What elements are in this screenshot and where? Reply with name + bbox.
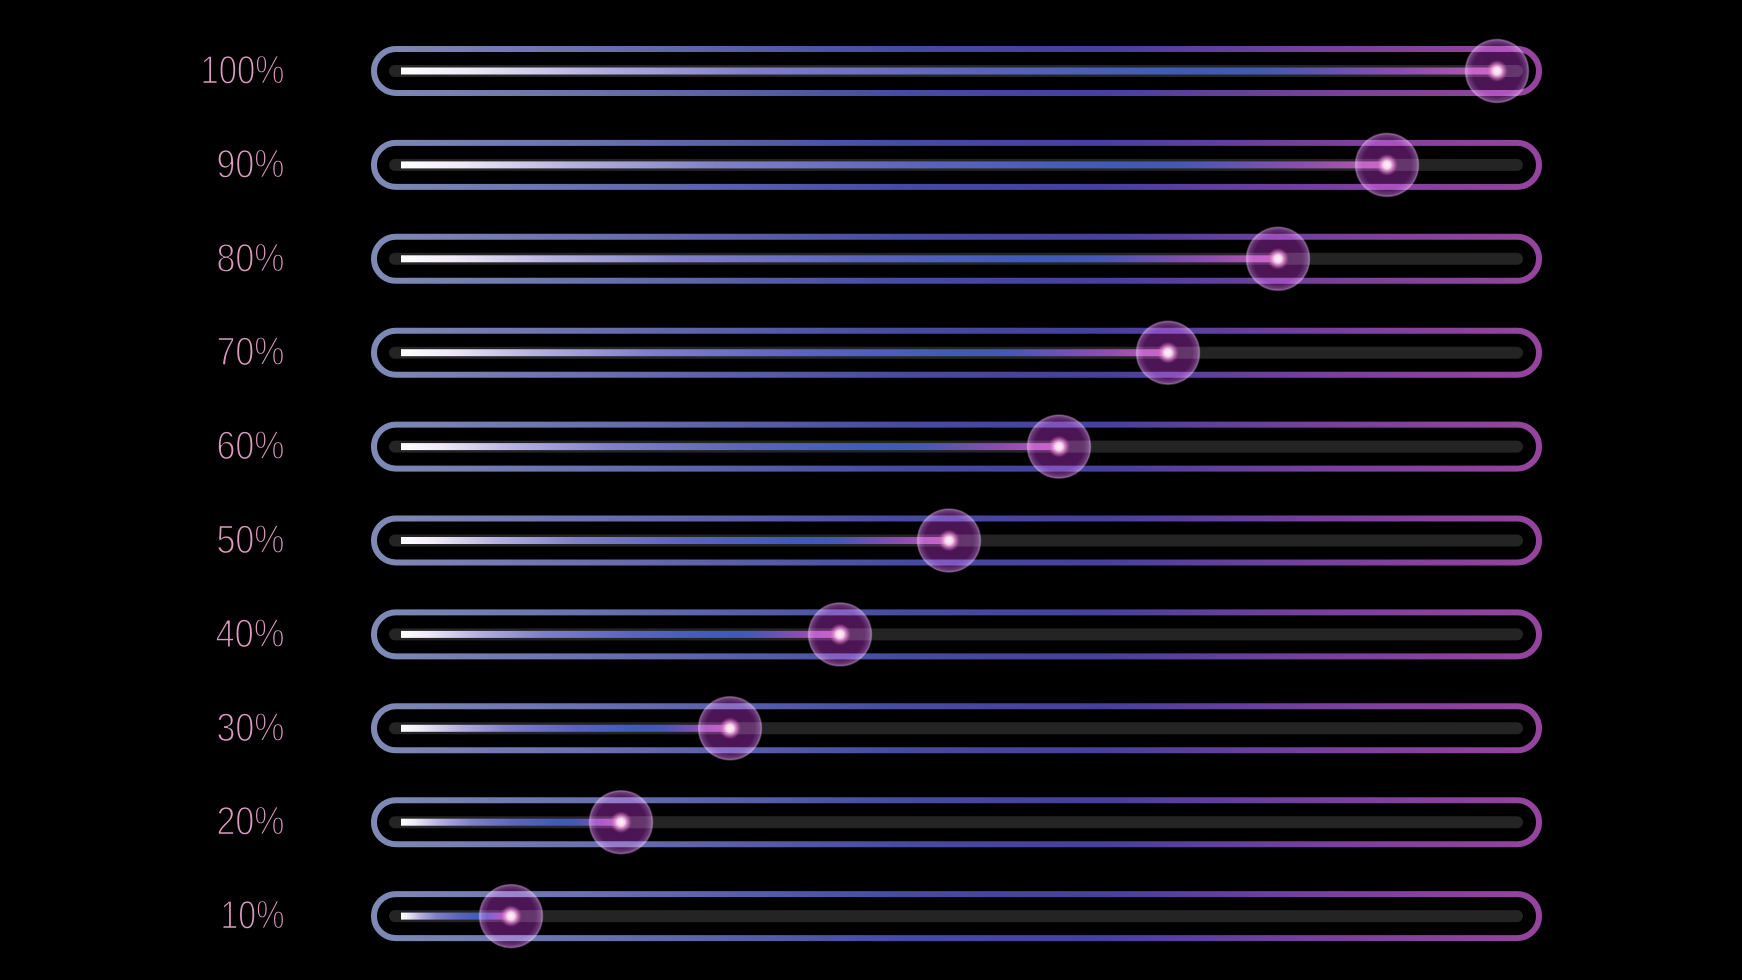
fill bar (401, 819, 621, 826)
capsule outline (374, 143, 1539, 187)
knob (918, 509, 980, 572)
capsule outline (374, 706, 1539, 750)
row: 50% (216, 509, 1539, 572)
fill bar (401, 255, 1278, 262)
label: 20%: 20% (216, 800, 284, 844)
track (389, 441, 1523, 453)
fill bar (401, 68, 1497, 74)
fill bar (401, 537, 949, 544)
track (389, 347, 1523, 359)
row: 80% (216, 227, 1539, 290)
row: 40% (216, 603, 1539, 666)
capsule outline (374, 518, 1539, 562)
label: 50%: 50% (216, 518, 284, 562)
row: 30% (216, 697, 1539, 760)
label: 40%: 40% (216, 612, 284, 656)
fill bar (401, 631, 840, 638)
fill bar (401, 913, 511, 920)
track (389, 816, 1523, 828)
fill bar (401, 443, 1059, 450)
knob (1028, 415, 1090, 478)
capsule outline (374, 425, 1539, 469)
track (389, 253, 1523, 265)
fill bar (401, 349, 1168, 356)
label: 70%: 70% (216, 330, 284, 374)
knob (698, 697, 762, 760)
label: 60%: 60% (216, 424, 284, 468)
capsule outline (374, 612, 1539, 656)
knob (1466, 40, 1528, 102)
capsule outline (374, 800, 1539, 844)
knob (480, 885, 542, 948)
capsule outline (374, 894, 1539, 938)
fill bar (401, 161, 1387, 168)
row: 90% (216, 133, 1539, 196)
knob (1136, 321, 1200, 384)
track (389, 722, 1523, 734)
track (389, 628, 1523, 640)
row: 70% (216, 321, 1539, 384)
label: 10%: 10% (220, 894, 284, 938)
label: 80%: 80% (216, 236, 284, 280)
track (389, 65, 1523, 77)
knob (590, 791, 652, 854)
capsule outline (374, 331, 1539, 375)
knob (1356, 133, 1418, 196)
label: 100%: 100% (200, 48, 284, 92)
track (389, 159, 1523, 171)
capsule outline (374, 237, 1539, 281)
label: 30%: 30% (216, 706, 284, 750)
track (389, 534, 1523, 546)
knob (808, 603, 872, 666)
fill bar (401, 725, 730, 732)
row: 10% (220, 885, 1539, 948)
knob (1246, 227, 1310, 290)
row: 100% (200, 40, 1539, 102)
track (389, 910, 1523, 922)
capsule outline (374, 49, 1539, 93)
row: 20% (216, 791, 1539, 854)
row: 60% (216, 415, 1539, 478)
label: 90%: 90% (216, 142, 284, 186)
